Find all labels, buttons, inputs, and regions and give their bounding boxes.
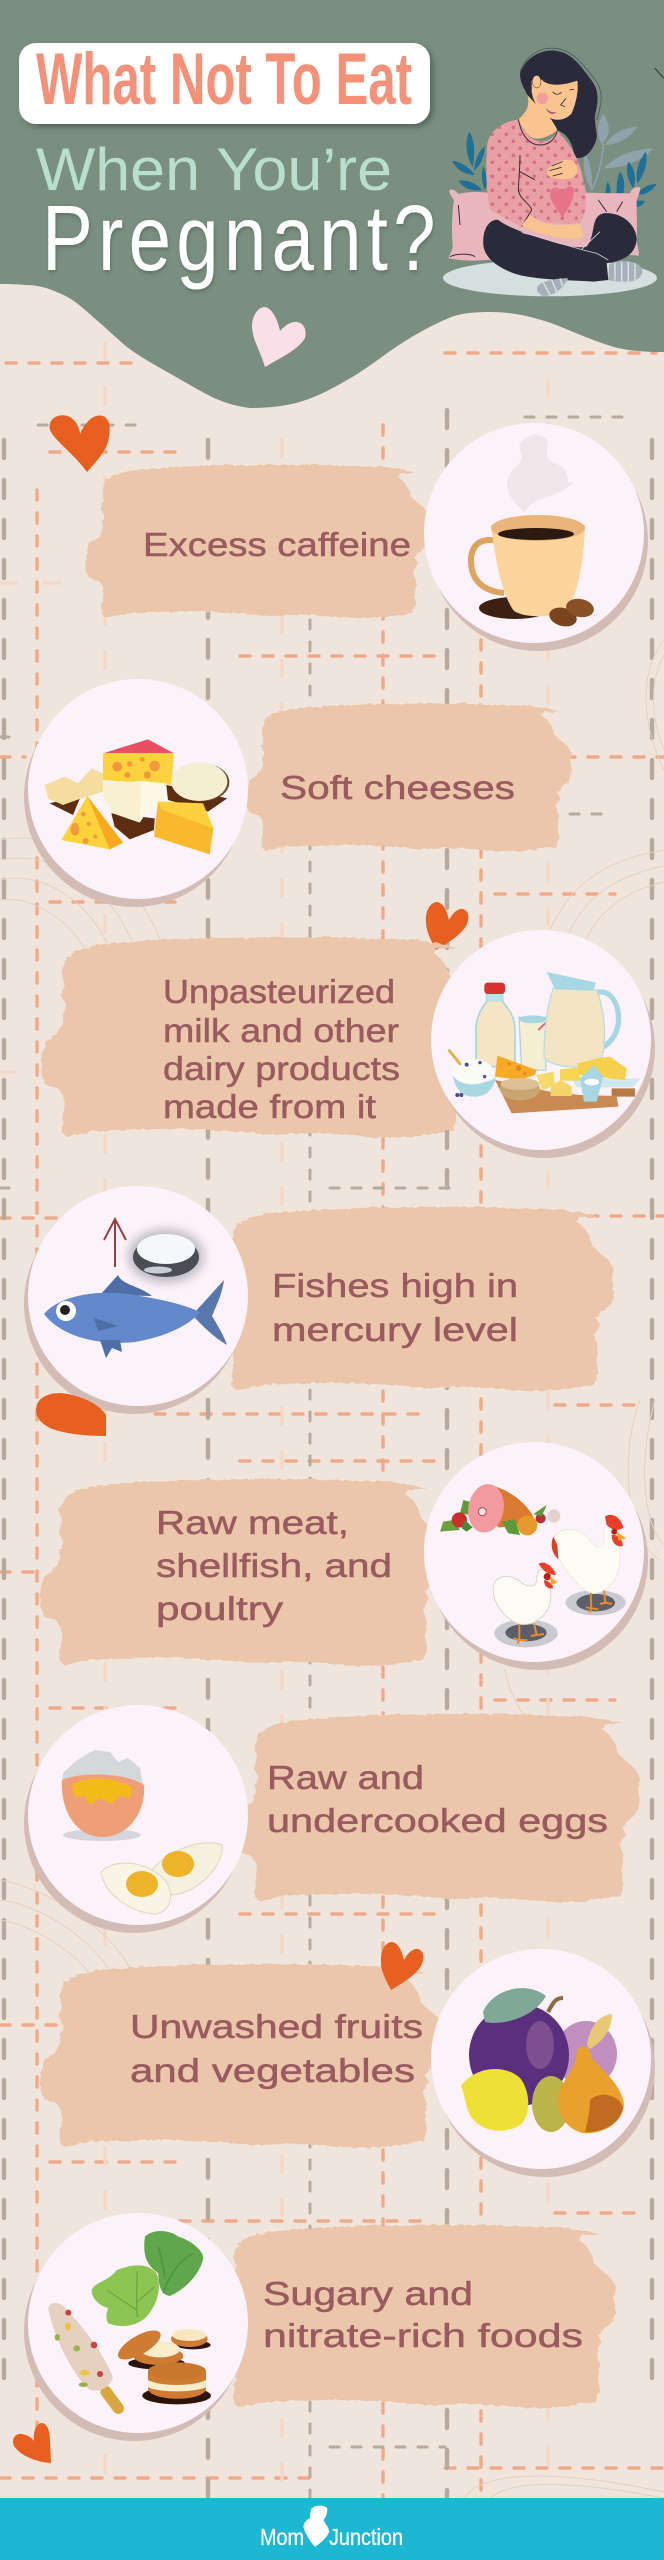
label: Unwashed fruits [130, 2008, 423, 2045]
logo [260, 2506, 403, 2550]
logo: Mom [260, 2524, 304, 2550]
icon: up arrow [104, 1219, 126, 1267]
text background brush [246, 703, 572, 851]
label [163, 973, 400, 1125]
text background brush [235, 1714, 640, 1902]
orange heart 4 [381, 1942, 423, 1990]
text background brush [40, 1479, 443, 1666]
label: shellfish, and [156, 1547, 392, 1584]
title line 2: When You’re [36, 136, 392, 203]
circle [24, 679, 248, 907]
icon: coffee cup [471, 434, 595, 629]
label [156, 1504, 392, 1627]
label: Unpasteurized [163, 973, 395, 1010]
illustration: pregnant woman [443, 48, 664, 296]
icon: dairy products [449, 972, 640, 1113]
icon: cracked egg [62, 1750, 144, 1841]
title pill [19, 39, 430, 124]
item: fishes high in mercury [24, 1186, 614, 1414]
icon: ice pop [48, 2303, 118, 2408]
item: raw eggs [24, 1705, 640, 1933]
icon: fruits [461, 1988, 624, 2133]
label: Raw meat, [156, 1504, 349, 1541]
text background brush [41, 937, 474, 1138]
circle [424, 1442, 648, 1670]
text background brush [212, 1207, 614, 1391]
label: milk and other [163, 1012, 399, 1049]
icon: ham [440, 1481, 560, 1535]
label: nitrate-rich foods [263, 2317, 583, 2354]
orange heart 3 [36, 1393, 106, 1436]
item: unwashed fruits [40, 1942, 655, 2177]
icon: large hen [552, 1515, 626, 1615]
item: raw meat [40, 1442, 648, 1670]
circle [24, 2213, 248, 2441]
orange heart 1 [50, 415, 110, 472]
footer bar [0, 2498, 664, 2560]
icon: biscuits [114, 2325, 211, 2404]
icon: mercury drop [128, 1229, 204, 1283]
logo: Junction [329, 2524, 403, 2550]
item: excess caffeine [85, 423, 648, 651]
header green wave [0, 0, 664, 408]
label: Excess caffeine [143, 526, 411, 563]
label [272, 1267, 518, 1348]
label: Soft cheeses [280, 769, 515, 806]
circle [424, 423, 648, 651]
label [130, 2008, 423, 2089]
label: Raw and [267, 1759, 424, 1796]
label: and vegetables [130, 2052, 415, 2089]
title line 3: Pregnant? [42, 187, 436, 291]
icon: fish [44, 1275, 227, 1358]
text background brush [40, 1964, 443, 2148]
pink heart [252, 307, 306, 367]
item: sugary foods [24, 2213, 616, 2441]
icon: boiled egg [101, 1843, 222, 1914]
item: soft cheeses [24, 679, 572, 907]
circle [24, 1705, 248, 1933]
circle [431, 1949, 655, 2177]
label: undercooked eggs [267, 1802, 608, 1839]
label: poultry [156, 1590, 284, 1627]
icon: small hen [493, 1563, 558, 1647]
label: made from it [163, 1088, 376, 1125]
belly heart [550, 186, 574, 217]
circle [431, 930, 655, 1158]
text background brush [214, 2224, 616, 2408]
orange heart 2 [426, 902, 468, 950]
orange heart 5 [13, 2423, 51, 2463]
label: Sugary and [263, 2275, 473, 2312]
title line 1: What Not To Eat [36, 39, 412, 120]
label [267, 1759, 608, 1839]
label: dairy products [163, 1050, 400, 1087]
item: unpasteurized milk [41, 930, 655, 1158]
label: Fishes high in [272, 1267, 518, 1304]
label: mercury level [272, 1311, 518, 1348]
circle [24, 1186, 248, 1414]
label [263, 2275, 583, 2354]
icon: leaves [92, 2231, 203, 2326]
text background brush [85, 464, 430, 618]
icon: cheeses [45, 739, 229, 854]
